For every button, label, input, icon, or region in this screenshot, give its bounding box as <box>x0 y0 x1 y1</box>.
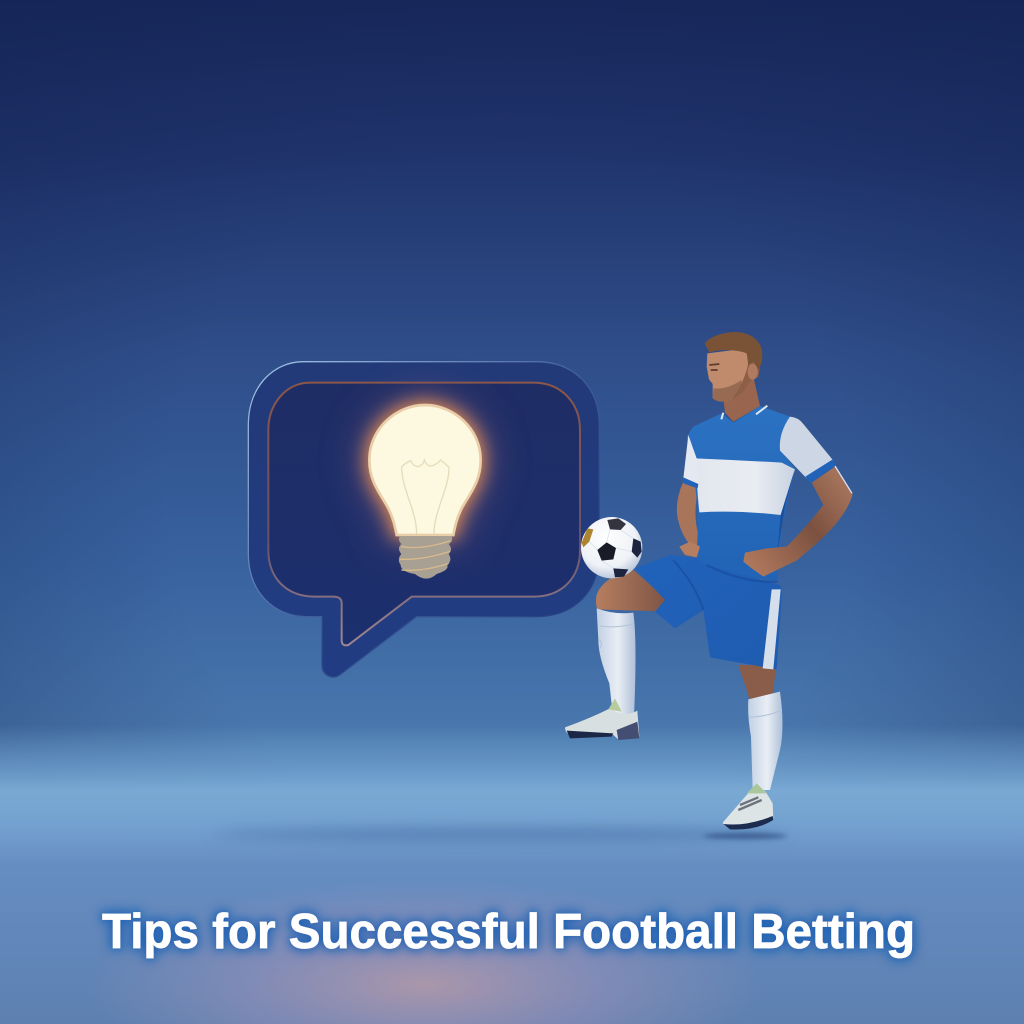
bulb glass <box>369 405 481 535</box>
bulb filament <box>402 460 449 534</box>
bulb glow <box>369 405 481 535</box>
face <box>707 348 760 402</box>
standing boot <box>723 788 773 829</box>
left sleeve <box>683 435 698 485</box>
jersey hem shading <box>707 565 777 582</box>
ear <box>748 364 758 380</box>
head <box>705 332 762 402</box>
hair <box>705 332 762 370</box>
jersey white band <box>696 458 795 515</box>
neck <box>723 377 760 422</box>
football <box>581 517 642 578</box>
title: Tips for Successful Football Betting <box>102 905 915 959</box>
football player <box>565 332 853 829</box>
rear arm <box>677 482 700 550</box>
right sleeve <box>780 417 833 478</box>
bubble inner panel <box>268 383 580 645</box>
standing leg <box>723 665 782 829</box>
shorts stripe <box>763 589 781 669</box>
light bulb <box>369 405 481 579</box>
bulb screw base <box>399 536 452 579</box>
bubble outer frame <box>248 362 599 677</box>
shorts <box>635 555 782 669</box>
jersey side panel <box>777 468 795 553</box>
left hand <box>679 542 700 557</box>
raised leg <box>565 570 670 740</box>
collar <box>721 406 767 419</box>
speech bubble with light bulb <box>248 362 599 677</box>
right arm and hand <box>743 466 853 577</box>
raised boot <box>565 708 639 739</box>
beard and eye <box>713 380 742 402</box>
sleeve cuff <box>805 459 835 483</box>
jersey <box>683 406 835 582</box>
